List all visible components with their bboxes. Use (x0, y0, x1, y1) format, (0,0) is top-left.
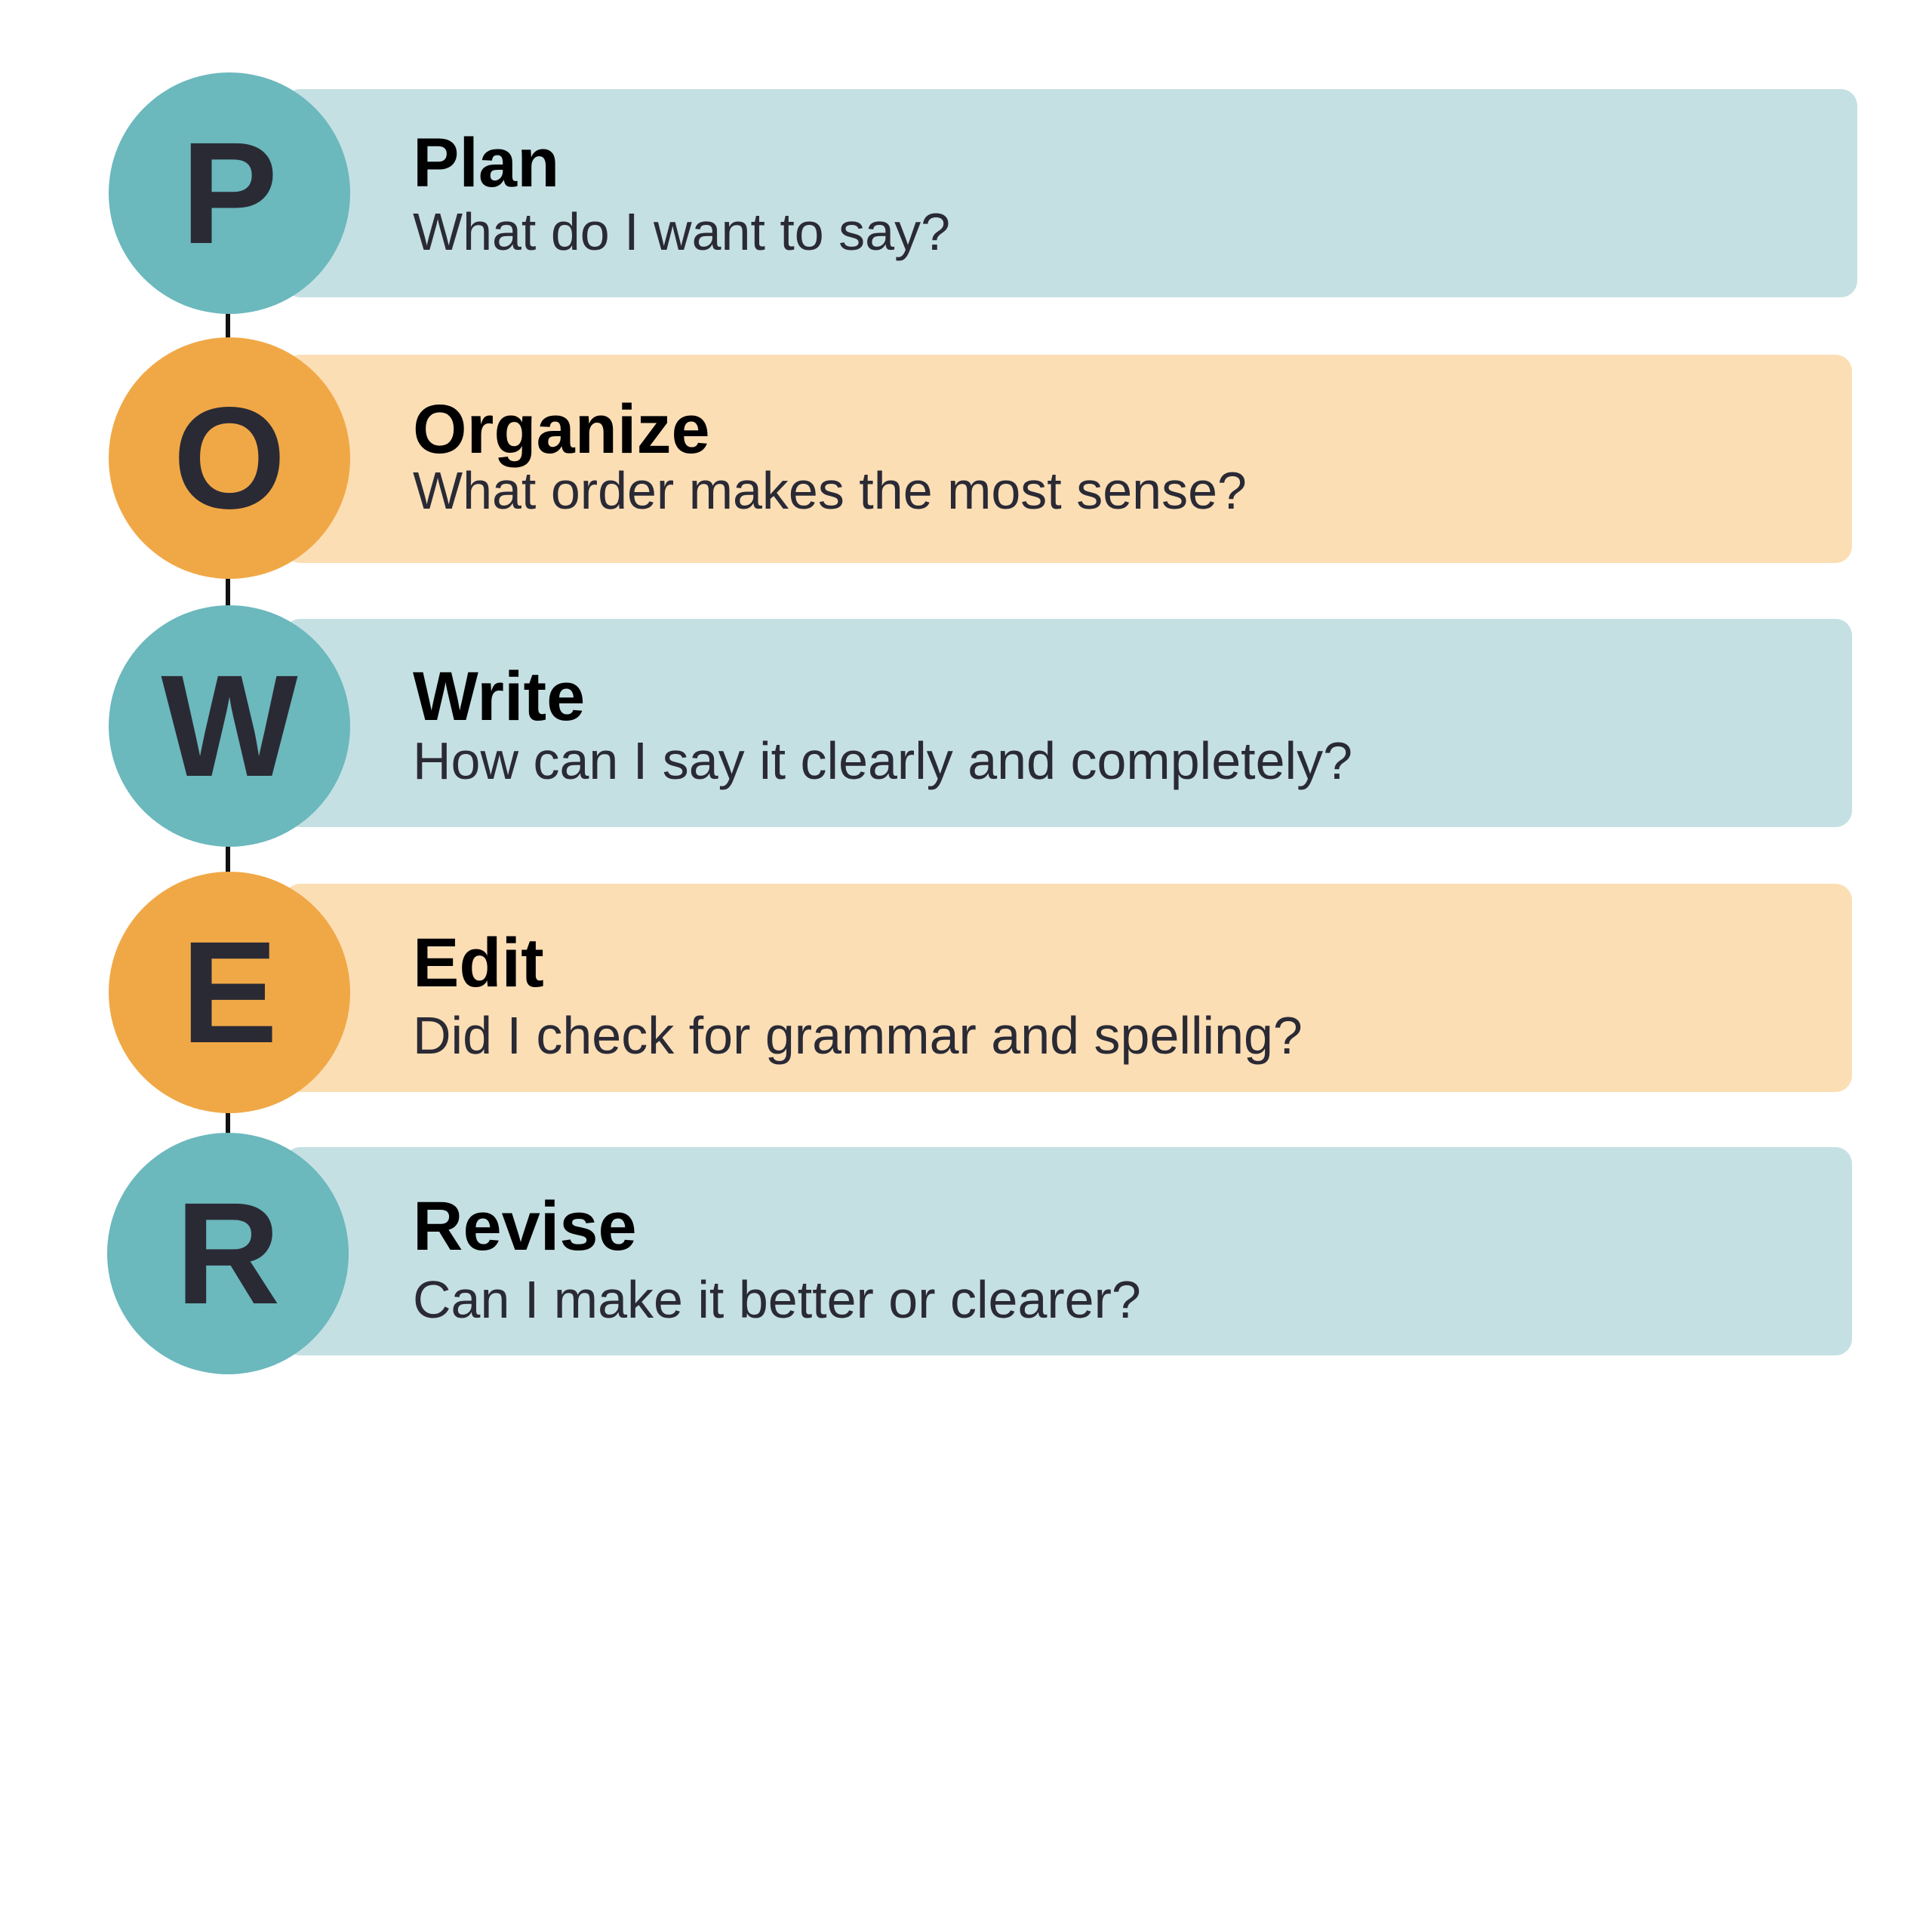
heading: Revise: Revise (413, 1188, 637, 1265)
bar: Revise (284, 1147, 1852, 1355)
row: Write (109, 605, 1852, 847)
circle: W (109, 605, 350, 847)
heading: Write: Write (413, 658, 585, 735)
row: Plan (109, 72, 1857, 314)
connector line (226, 302, 230, 1238)
bar: Write (284, 619, 1852, 827)
circle: R: R (176, 1172, 280, 1334)
circle: P: P (181, 112, 278, 274)
circle: R (107, 1133, 349, 1374)
text: Plan question: What do I want to say? (413, 202, 950, 261)
circle: O (109, 337, 350, 579)
heading: Edit: Edit (413, 924, 544, 1001)
bar: Plan (284, 89, 1857, 297)
bar: Edit (284, 884, 1852, 1092)
circle: P (109, 72, 350, 314)
text: Revise question: Can I make it better or clearer? (413, 1270, 1141, 1329)
row: Organize (109, 337, 1852, 579)
row: Revise (107, 1133, 1852, 1374)
text: Edit question: Did I check for grammar and spelling? (413, 1006, 1303, 1065)
circle: W: W (161, 645, 298, 807)
heading: Plan: Plan (413, 125, 559, 202)
row: Edit (109, 872, 1852, 1113)
circle: O: O (173, 377, 286, 539)
bar: Organize (284, 355, 1852, 563)
circle: E: E (181, 911, 278, 1073)
heading: Organize: Organize (413, 391, 710, 468)
text: Write question: How can I say it clearly and completely? (413, 731, 1352, 790)
text: Organize question: What order makes the most sense? (413, 461, 1247, 520)
circle: E (109, 872, 350, 1113)
